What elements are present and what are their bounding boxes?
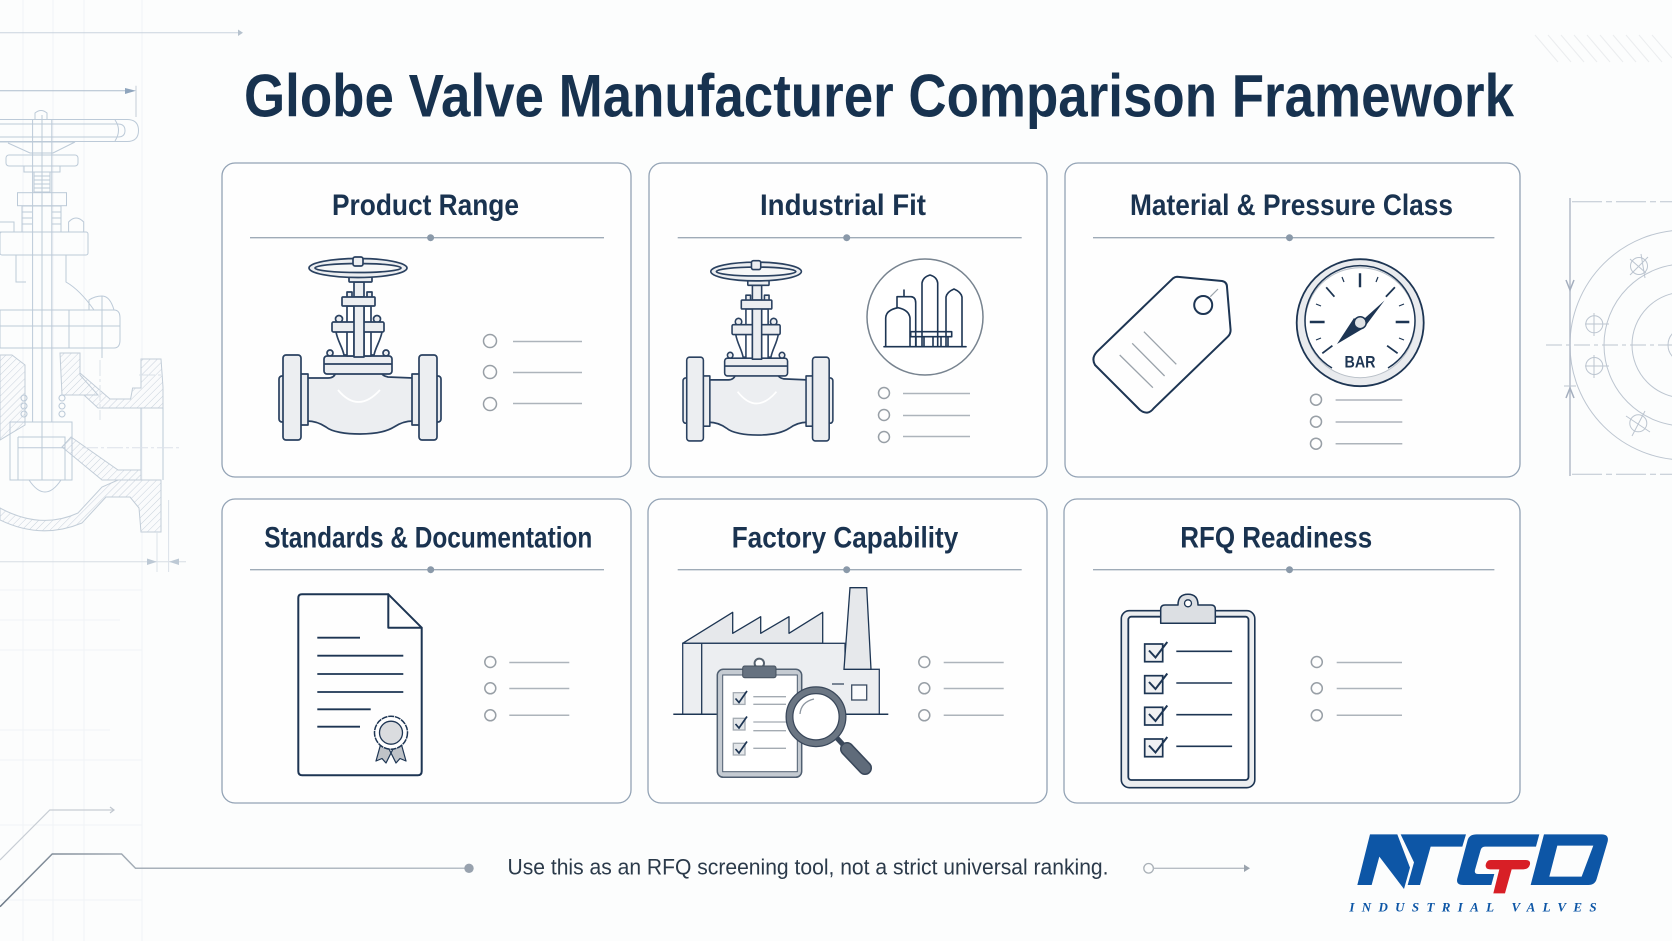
icon: globe valve [683,261,833,441]
heading: factory capability: Factory Capability [732,521,959,554]
icon: pressure gauge: BAR [1344,352,1376,371]
icon: checklist clipboard [1121,594,1255,788]
bullet placeholders [1310,394,1402,449]
connector: left of footer note [0,854,474,907]
bullet placeholders [878,388,970,442]
icon: refinery in circle [867,259,983,375]
logo: NTGD industrial valves: INDUSTRIAL VALVES [1348,900,1597,915]
background grid [0,0,142,941]
icon: factory with inspection clipboard [673,588,888,777]
logo: NTGD industrial valves [1348,834,1608,915]
icon: certificate document [298,594,422,775]
panel: industrial fit [649,163,1047,477]
panel: standards and documentation [222,499,631,803]
bullet placeholders [919,656,1004,721]
heading: rfq readiness: RFQ Readiness [1180,521,1372,554]
background drawing: top-right hatching [1535,35,1672,62]
footer note: Use this as an RFQ screening tool, not a strict universal ranking. [508,854,1108,879]
bullet placeholders [484,334,582,410]
connector: right of footer note [1144,864,1250,873]
bullet placeholders [1311,656,1402,721]
heading: material and pressure class: Material & Pressure Class [1130,189,1453,222]
icon: material tag [1093,277,1231,413]
section hatching of body [0,353,163,532]
icon: globe valve [279,257,441,440]
bullet placeholders [485,656,569,721]
title: Globe Valve Manufacturer Comparison Framework [244,62,1515,130]
background drawing: flange blueprint [1546,198,1672,476]
heading: product range: Product Range [332,189,519,222]
panel: factory capability [648,499,1047,803]
background drawing: valve cross-section blueprint [0,30,243,572]
background connector lines bottom left [0,807,114,860]
panel: product range [222,163,631,477]
icon: pressure gauge [1297,259,1424,386]
heading: industrial fit: Industrial Fit [760,189,926,222]
heading: standards and documentation: Standards & Documentation [264,521,592,554]
panel: material and pressure class [1065,163,1520,477]
panel: rfq readiness [1064,499,1520,803]
